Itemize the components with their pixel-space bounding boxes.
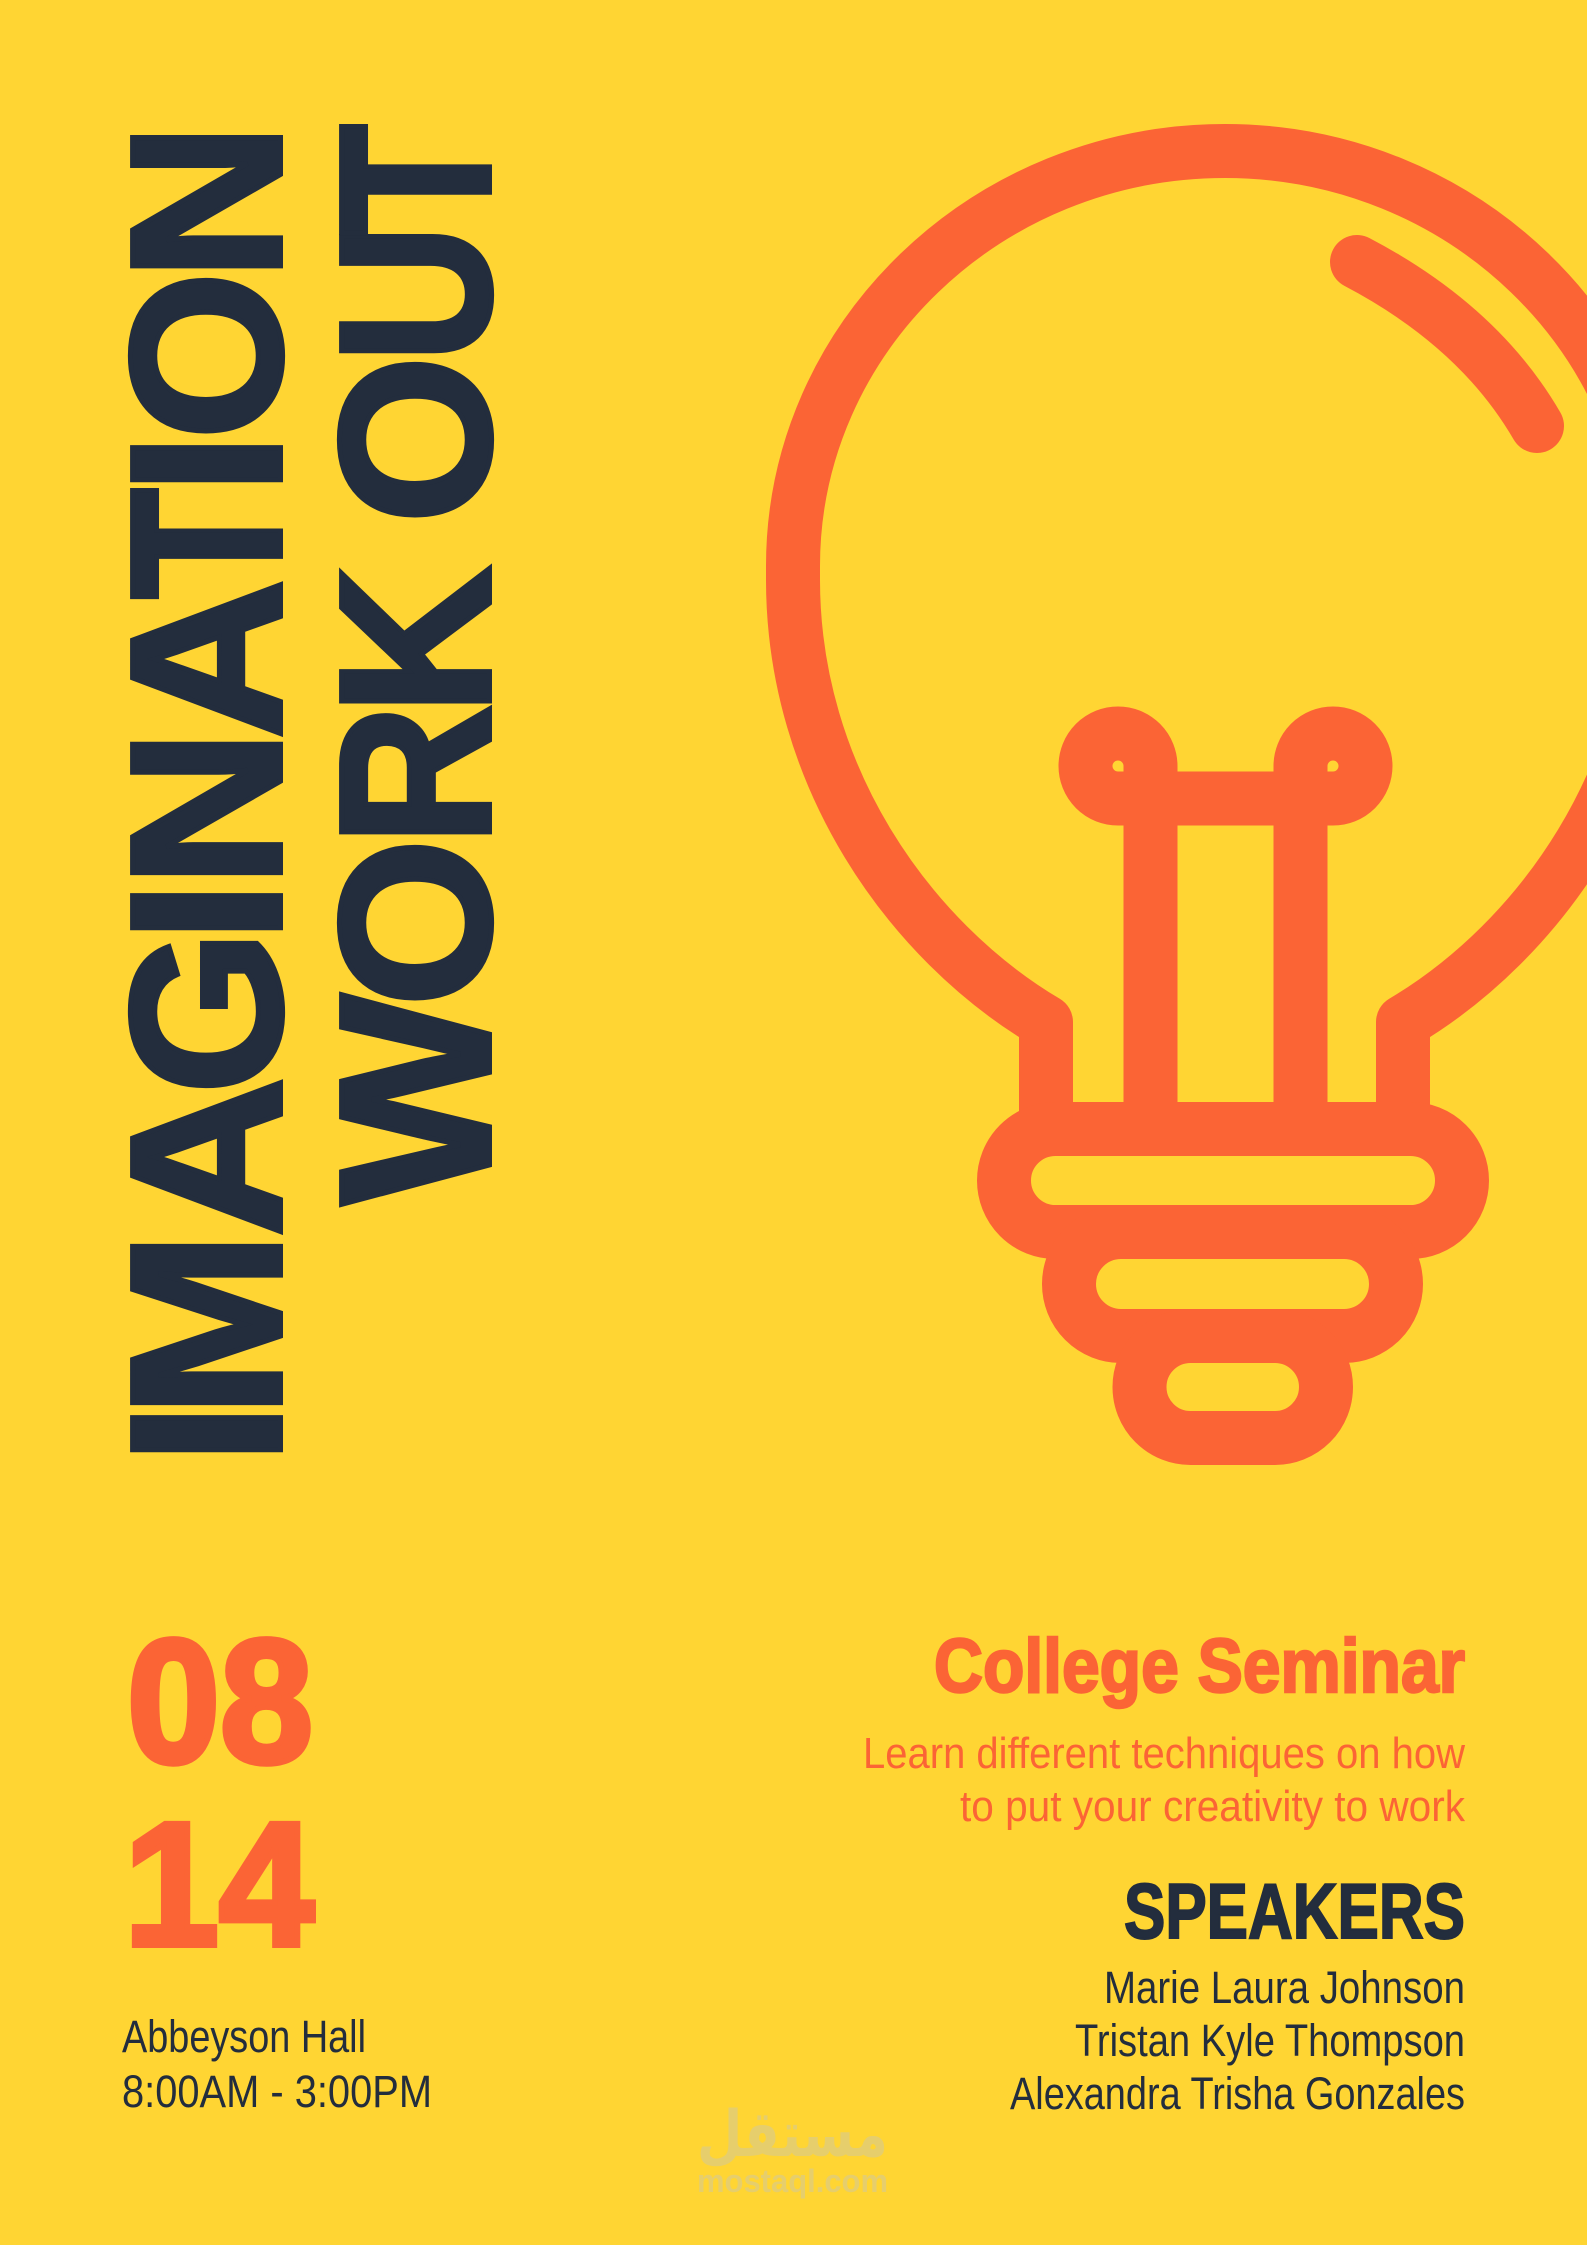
date: day: 14: [124, 1787, 314, 1983]
watermark: arabic logotype: مستقل: [697, 2098, 888, 2172]
title line: IMAGINATION: M: [86, 1232, 326, 1418]
venue: Abbeyson Hall: [122, 2011, 366, 2062]
icon: light bulb: [793, 151, 1587, 1438]
title line: IMAGINATION: T: [86, 488, 326, 599]
title line: WORK OUT: U: [294, 224, 536, 362]
title line: WORK OUT: T: [294, 124, 536, 235]
title line: WORK OUT: R: [294, 705, 536, 845]
title line: WORK OUT: W: [294, 994, 536, 1204]
title line: IMAGINATION: I: [86, 1403, 326, 1464]
date numbers: [124, 1604, 314, 1983]
title line: IMAGINATION: N: [86, 123, 326, 280]
title line: IMAGINATION: A: [86, 579, 326, 739]
title line: IMAGINATION: G: [86, 930, 326, 1094]
description line 2: to put your creativity to work: [960, 1782, 1466, 1831]
title line: WORK OUT: O: [294, 838, 536, 1007]
watermark: url: mostaql.com: [697, 2163, 888, 2199]
watermark: [697, 2098, 888, 2199]
filament: [1086, 734, 1366, 1130]
time: 8:00AM - 3:00PM: [122, 2066, 432, 2117]
screw base: bottom ring: [1140, 1336, 1326, 1438]
seminar description: [863, 1729, 1466, 1831]
title: vertical heading: [86, 123, 536, 1464]
bulb glass outline: [793, 151, 1587, 1125]
speakers heading: SPEAKERS: [1124, 1867, 1465, 1955]
screw base: top ring: [1004, 1129, 1462, 1232]
speaker 2: Tristan Kyle Thompson: [1075, 2015, 1465, 2066]
speaker 3: Alexandra Trisha Gonzales: [1010, 2068, 1465, 2119]
speakers list: [1010, 1962, 1465, 2119]
description line 1: Learn different techniques on how: [863, 1729, 1465, 1778]
title line: WORK OUT: K: [294, 566, 536, 715]
title line: IMAGINATION: O: [86, 271, 326, 440]
venue and time: [122, 2011, 432, 2117]
screw base: middle ring: [1069, 1232, 1396, 1336]
title line: WORK OUT: O: [294, 355, 536, 524]
seminar heading: College Seminar: [934, 1624, 1465, 1709]
bulb highlight: [1357, 262, 1537, 426]
title line: IMAGINATION: I: [86, 433, 326, 494]
speaker 1: Marie Laura Johnson: [1104, 1962, 1465, 2013]
title line: IMAGINATION: N: [86, 730, 326, 887]
title line: IMAGINATION: A: [86, 1077, 326, 1237]
date: month: 08: [127, 1604, 313, 1800]
title line: IMAGINATION: I: [86, 881, 326, 942]
